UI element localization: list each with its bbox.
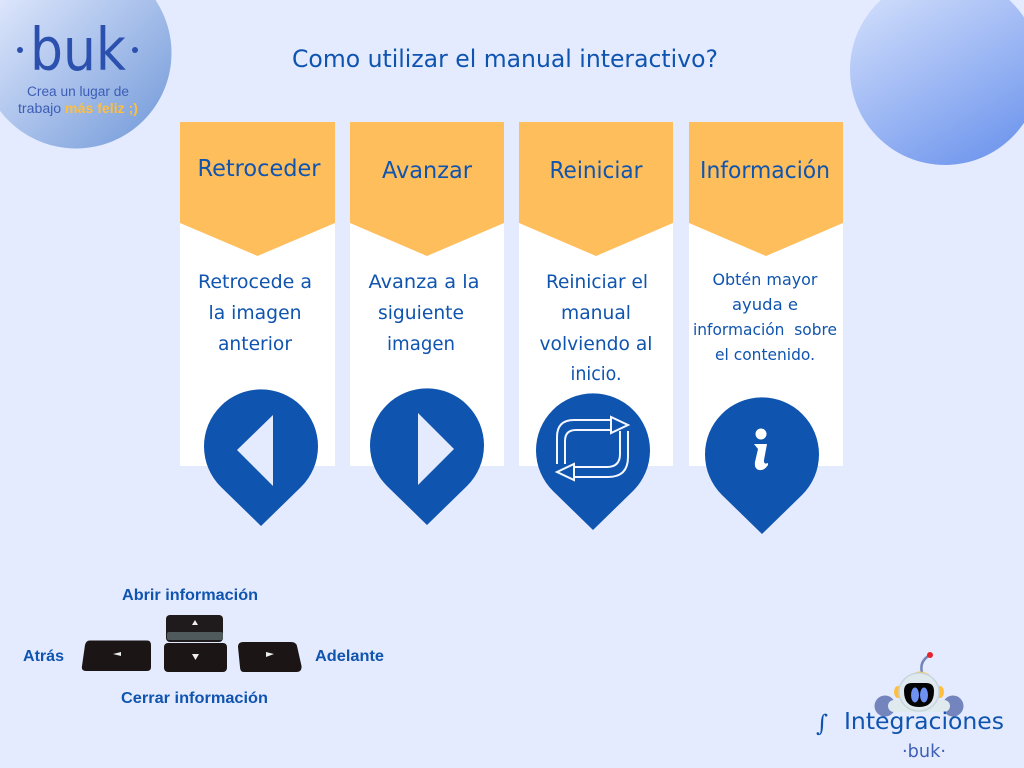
icon: back pin bbox=[204, 389, 318, 526]
banner: Reiniciar bbox=[519, 122, 673, 256]
label: Adelante: Adelante bbox=[315, 648, 384, 665]
panel: Avanzar bbox=[350, 122, 504, 525]
label: Abrir información: Abrir información bbox=[122, 587, 258, 604]
heading: Reiniciar: Reiniciar bbox=[550, 158, 643, 184]
icon: forward pin bbox=[370, 388, 484, 525]
text: Retroceder description: anterior bbox=[218, 333, 292, 355]
text: Retroceder description: la imagen bbox=[208, 302, 302, 324]
logo: buk with tagline bbox=[0, 0, 172, 148]
logo: buk with tagline: buk bbox=[30, 15, 126, 84]
key: up bbox=[166, 615, 223, 642]
icon: info pin bbox=[705, 397, 819, 534]
text: Integraciones: Integraciones bbox=[844, 709, 1004, 735]
text: Retroceder description: Retrocede a bbox=[198, 271, 312, 293]
banner: Información bbox=[689, 122, 843, 256]
heading: Información: Información bbox=[700, 158, 830, 184]
text: Información description: Obtén mayor bbox=[712, 270, 818, 289]
icon: robot bbox=[874, 652, 964, 716]
logo: buk with tagline: trabajo más feliz ;) bbox=[18, 101, 138, 116]
title: Como utilizar el manual interactivo? bbox=[292, 45, 718, 73]
panel: Retroceder bbox=[180, 122, 335, 526]
text: Avanzar description: siguiente bbox=[378, 302, 464, 324]
banner: Avanzar bbox=[350, 122, 504, 256]
label: Cerrar información: Cerrar información bbox=[121, 690, 268, 707]
text: Reiniciar description: inicio. bbox=[570, 363, 622, 385]
icon: restart pin bbox=[536, 393, 650, 530]
text: Reiniciar description: manual bbox=[561, 302, 631, 324]
key labels and keys bbox=[23, 587, 384, 707]
text: Avanzar description: imagen bbox=[387, 333, 455, 355]
text: Información description: ayuda e bbox=[732, 295, 798, 314]
text: Reiniciar description: volviendo al bbox=[540, 333, 652, 355]
text: Avanzar description bbox=[368, 271, 480, 355]
text: buk: ·buk· bbox=[902, 741, 946, 762]
text: Información description: el contenido. bbox=[715, 345, 815, 364]
text: Información description bbox=[693, 270, 837, 364]
logo: Integraciones buk bbox=[816, 652, 1004, 762]
decorative circle: top right bbox=[850, 0, 1024, 165]
text: Retroceder description bbox=[198, 271, 312, 355]
heading: Avanzar: Avanzar bbox=[382, 158, 473, 184]
banner: Retroceder bbox=[180, 122, 335, 256]
key: left bbox=[82, 640, 151, 671]
icon: integral sign: ∫ bbox=[816, 711, 828, 737]
key: down bbox=[164, 643, 227, 672]
logo: buk with tagline: Crea un lugar de bbox=[27, 84, 129, 99]
text: Reiniciar description bbox=[540, 271, 652, 385]
panel: Información bbox=[689, 122, 843, 534]
key: right bbox=[238, 642, 302, 672]
text: Información description: información sobre bbox=[693, 320, 837, 339]
text: Avanzar description: Avanza a la bbox=[368, 271, 480, 293]
panel: Reiniciar bbox=[519, 122, 673, 530]
label: Atrás: Atrás bbox=[23, 648, 64, 665]
text: Reiniciar description: Reiniciar el bbox=[546, 271, 648, 293]
heading: Retroceder: Retroceder bbox=[198, 156, 321, 182]
